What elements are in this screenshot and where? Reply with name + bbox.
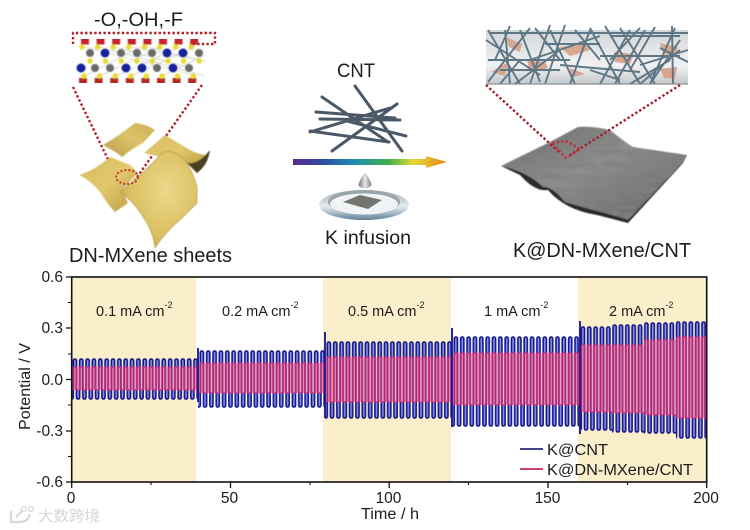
current density labels (96, 300, 673, 320)
legend: K@DN-MXene/CNT (547, 462, 694, 479)
y axis tick labels: -0.6 (36, 474, 63, 491)
icon: CNT network box (486, 25, 688, 84)
label: CNT: CNT (337, 61, 375, 82)
current density labels: 2 mA cm (609, 304, 665, 320)
icon: yellow MXene sheets (79, 123, 210, 248)
panel: K@DN-MXene/CNT (486, 25, 691, 262)
panel: process (293, 61, 447, 249)
y axis tick labels: 0.3 (41, 320, 63, 337)
x axis tick labels (67, 490, 719, 507)
y axis tick labels (36, 269, 63, 491)
current density labels: -2 (416, 300, 425, 310)
label: K infusion: K infusion (325, 228, 411, 249)
watermark (11, 507, 100, 525)
current density labels: 0.1 mA cm (96, 304, 164, 320)
current density labels: 0.2 mA cm (222, 304, 290, 320)
current density labels: 1 mA cm (484, 304, 540, 320)
chart: voltage profile (17, 269, 719, 523)
current density labels: -2 (540, 300, 548, 310)
data: K@CNT and K@DN-MXene/CNT curves (72, 300, 707, 445)
label: DN-MXene sheets: DN-MXene sheets (69, 244, 232, 267)
label: K@DN-MXene/CNT: K@DN-MXene/CNT (513, 240, 691, 262)
current density labels: -2 (665, 300, 673, 310)
icon: MXene atomic lattice (76, 41, 205, 81)
icon: dotted zoom bracket (486, 85, 680, 158)
current density labels: -2 (290, 300, 299, 310)
x axis tick labels: 200 (693, 490, 719, 507)
icon: dotted ring (116, 170, 138, 184)
x axis tick labels: 50 (221, 490, 238, 507)
y axis tick labels: 0.6 (41, 269, 63, 286)
y axis tick labels: -0.3 (36, 423, 63, 440)
icon: potassium droplet and dish (319, 172, 409, 220)
panel: DN-MXene sheets (69, 10, 232, 267)
watermark: 大数跨境 (38, 507, 100, 525)
x axis tick labels: 100 (376, 490, 402, 507)
axes frame and ticks (66, 277, 707, 488)
y axis title: Potential / V (17, 343, 34, 430)
legend: K@CNT (547, 442, 609, 459)
y axis tick labels: 0.0 (41, 372, 63, 389)
arrow: rainbow process arrow (293, 156, 447, 168)
icon: grey composite film (500, 125, 690, 225)
x axis title: Time / h (361, 506, 419, 523)
icon: carbon nanotubes (310, 86, 406, 151)
icon: dotted zoom bracket (73, 33, 215, 180)
x axis tick labels: 0 (67, 490, 76, 507)
x axis tick labels: 150 (535, 490, 561, 507)
current density labels: 0.5 mA cm (348, 304, 416, 320)
legend (520, 442, 694, 479)
heading: surface groups: -O,-OH,-F (94, 10, 183, 31)
current density labels: -2 (164, 300, 173, 310)
shaded current density bands (72, 277, 707, 482)
